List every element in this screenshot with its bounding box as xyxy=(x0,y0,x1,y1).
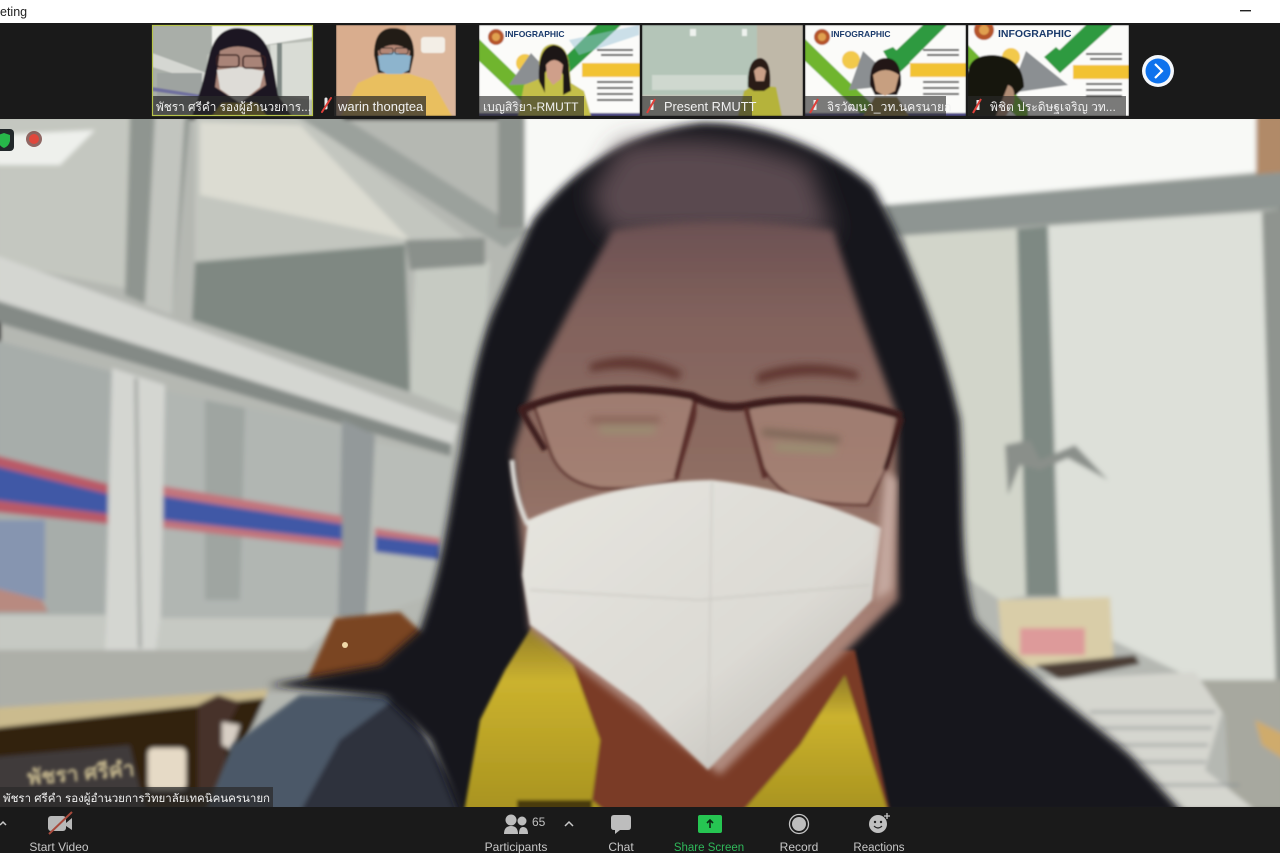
thumbnail: warin thongtea: warin thongtea xyxy=(337,99,424,114)
bag stud xyxy=(342,642,348,648)
shelf beam xyxy=(0,255,458,450)
glasses xyxy=(520,390,902,505)
speaker face xyxy=(512,221,898,775)
wall panels xyxy=(905,229,1026,600)
box and papers xyxy=(998,597,1114,668)
thumbnail: jirawatthana: จิรวัฒนา_วท.นครนายก xyxy=(827,100,951,114)
thumbnail: pichit: INFOGRAPHIC xyxy=(998,28,1072,40)
thumbnail: benjasiriya RMUTT xyxy=(479,25,640,116)
face mask xyxy=(512,460,882,770)
icon: muted microphone xyxy=(322,98,331,112)
thumbnail: Present RMUTT: Present RMUTT xyxy=(664,99,757,114)
thumbnail: benjasiriya RMUTT: INFOGRAPHIC xyxy=(505,29,564,39)
speaker name caption xyxy=(0,787,273,807)
button: start video xyxy=(29,812,89,853)
thumbnail: pichit: พิชิต ประดิษฐเจริญ วท... xyxy=(990,100,1116,114)
speaker hair xyxy=(268,123,1185,815)
thumbnail: warin thongtea xyxy=(334,25,456,116)
bright window xyxy=(515,115,1256,228)
icon: recording dot xyxy=(26,131,42,147)
title bar: eting xyxy=(0,5,27,19)
icon: next page arrow xyxy=(1142,55,1174,87)
eyebrows and eyes xyxy=(590,358,858,450)
thumbnail: presenter xyxy=(152,25,313,116)
lower cabinet xyxy=(0,615,105,650)
speaker crown highlight xyxy=(590,140,835,235)
thumbnail: jirawatthana: INFOGRAPHIC xyxy=(831,29,890,39)
left upper glass xyxy=(0,115,130,288)
icon: security shield xyxy=(0,129,14,151)
speaker jacket and bag xyxy=(205,612,470,812)
button: participants xyxy=(485,814,547,853)
button: share screen xyxy=(674,815,744,853)
toolbar xyxy=(0,807,1280,853)
thumbnail: jirawatthana xyxy=(805,25,966,116)
lower glass xyxy=(0,340,113,615)
thumbnail: Present RMUTT xyxy=(642,25,803,116)
button: participants: 65 xyxy=(532,815,546,829)
thumbnail strip xyxy=(152,24,1174,116)
button: chat xyxy=(608,815,634,853)
button: record xyxy=(780,814,818,853)
speaker name caption: พัชรา ศรีคำ รองผู้อำนวยการวิทยาลัยเทคนิคนครนายก xyxy=(3,792,270,805)
stripes xyxy=(0,464,110,517)
thumbnail: pichit xyxy=(968,20,1129,116)
nameplate text: พัชรา ศรีคำ xyxy=(26,757,135,790)
thumbnail: benjasiriya RMUTT: เบญสิริยา-RMUTT xyxy=(483,100,579,114)
speaker neck and chest xyxy=(464,625,890,812)
right cheek highlight xyxy=(875,470,897,600)
thumbnail: presenter: พัชรา ศรีคำ รองผู้อำนวยการ... xyxy=(156,100,311,115)
button: reactions xyxy=(853,813,905,853)
title bar xyxy=(0,0,1280,23)
